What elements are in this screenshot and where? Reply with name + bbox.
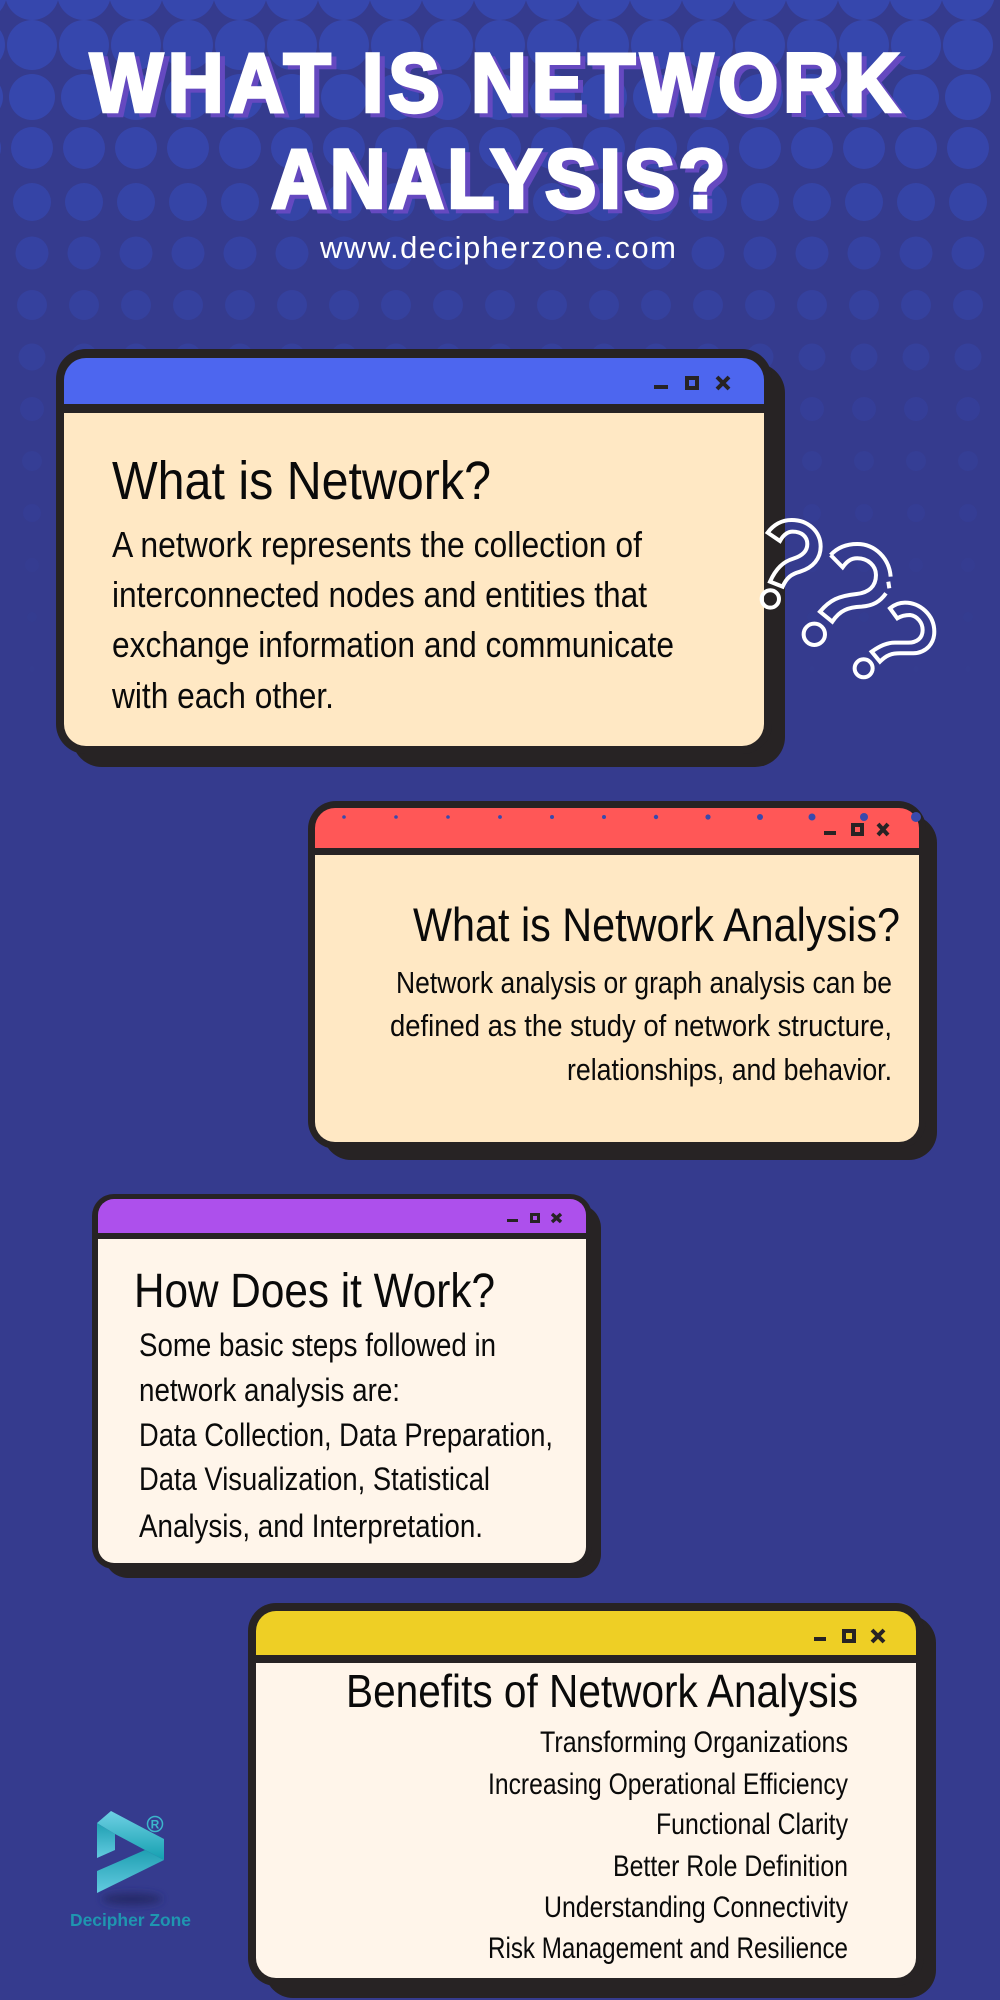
panel: what is network: [56, 349, 785, 767]
text block: benefits list: [488, 1726, 848, 1965]
text block: network definition: A network represents the collection of: [112, 524, 643, 565]
text block: network analysis definition: [390, 965, 892, 1087]
heading: how does it work: How Does it Work?: [134, 1265, 495, 1318]
text block: network analysis definition: defined as the study of network structure,: [390, 1008, 892, 1043]
logo: decipher zone: [70, 1811, 191, 1930]
text block: network analysis steps: Analysis, and Interpretation.: [139, 1508, 483, 1544]
heading: what is network: What is Network?: [112, 451, 491, 511]
panel: how does it work: [92, 1194, 601, 1578]
text block: network definition: exchange information and communicate: [112, 624, 674, 665]
icon: window controls: [814, 1630, 884, 1642]
text block: network analysis steps: Data Visualization, Statistical: [139, 1461, 490, 1497]
text block: network analysis steps: Data Collection, Data Preparation,: [139, 1417, 553, 1453]
title: [90, 37, 900, 226]
text block: benefits list: Risk Management and Resilience: [488, 1932, 848, 1965]
panel: benefits of network analysis: [248, 1603, 936, 1998]
text block: network definition: [111, 524, 674, 716]
text block: network analysis definition: relationships, and behavior.: [567, 1052, 892, 1087]
text block: network analysis definition: Network analysis or graph analysis can be: [396, 965, 892, 1000]
panel: what is network analysis: [308, 801, 937, 1160]
icon: question marks: [762, 520, 934, 677]
logo: decipher zone: Decipher Zone: [70, 1910, 191, 1930]
text block: benefits list: Functional Clarity: [656, 1808, 848, 1841]
text block: network analysis steps: Some basic steps followed in: [139, 1327, 496, 1363]
text block: network analysis steps: network analysis are:: [139, 1372, 400, 1408]
logo: decipher zone: R: [151, 1818, 160, 1832]
text block: network definition: with each other.: [111, 675, 334, 716]
text block: benefits list: Better Role Definition: [613, 1850, 848, 1883]
heading: benefits of network analysis: Benefits of Network Analysis: [346, 1665, 858, 1717]
heading: what is network analysis: What is Network Analysis?: [413, 898, 900, 951]
website url: www.decipherzone.com: [319, 230, 676, 265]
icon: window controls: [507, 1214, 561, 1222]
icon: window controls: [824, 824, 888, 835]
icon: window controls: [654, 377, 729, 389]
title: ANALYSIS?: [271, 133, 725, 226]
text block: benefits list: Understanding Connectivity: [544, 1891, 848, 1924]
title: WHAT IS NETWORK: [90, 37, 900, 130]
text block: benefits list: Transforming Organizations: [540, 1726, 848, 1759]
text block: benefits list: Increasing Operational Efficiency: [488, 1768, 848, 1801]
text block: network definition: interconnected nodes and entities that: [112, 574, 647, 615]
text block: network analysis steps: [139, 1327, 553, 1544]
